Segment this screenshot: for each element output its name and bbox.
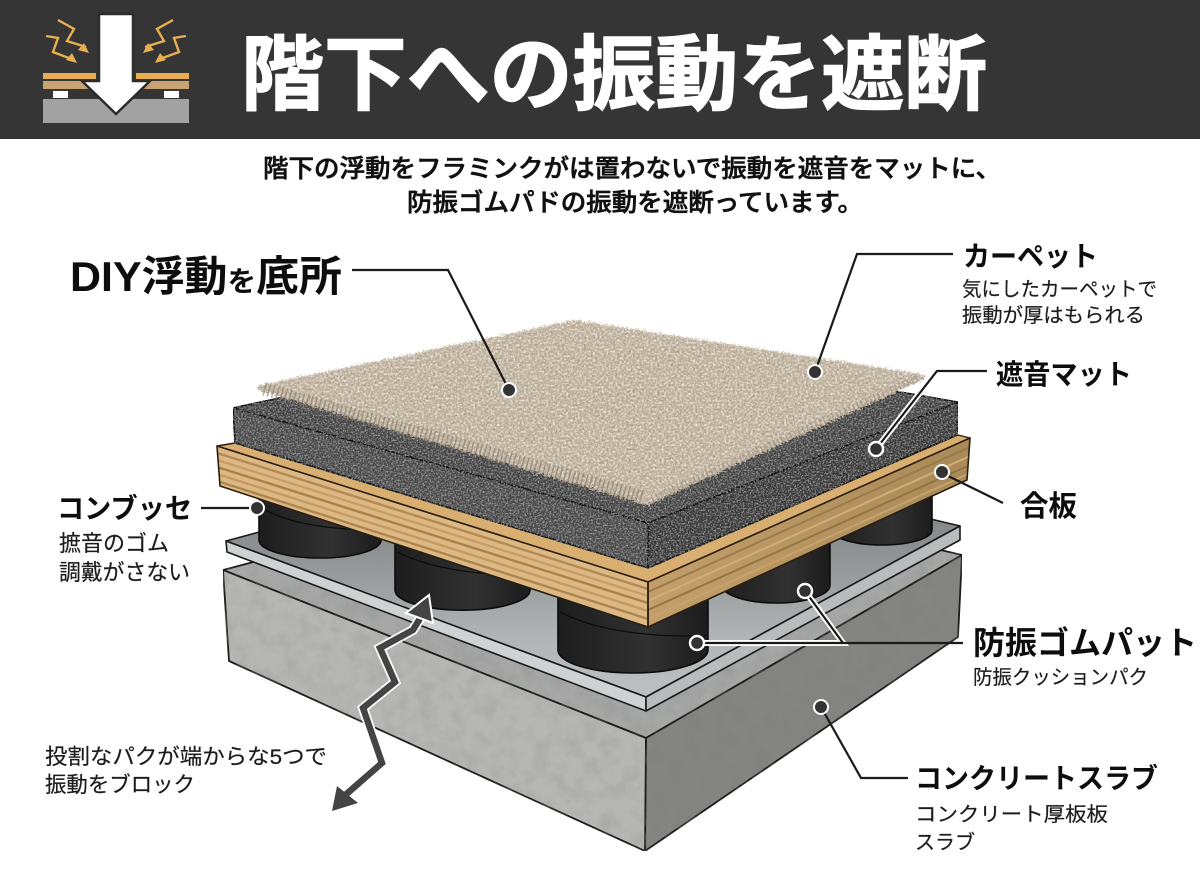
callout: carpet: カーペット xyxy=(963,241,1098,272)
note: block vibration: 投割なパクが端からな5つで xyxy=(45,745,327,769)
sound insulation mat xyxy=(233,335,958,568)
callout: concrete slab: コンクリートスラブ xyxy=(915,762,1158,794)
rubber pads xyxy=(259,470,932,673)
icon: vibration blocked by floor layers xyxy=(43,14,189,123)
carpet xyxy=(261,323,922,502)
callout: concrete slab: コンクリート厚板板 xyxy=(915,803,1108,826)
layered floor diagram xyxy=(217,323,970,851)
metal plate xyxy=(226,440,960,711)
callout: plywood: 合板 xyxy=(1020,490,1077,523)
note: block vibration xyxy=(45,745,327,797)
callout: anti-vibration rubber pad: 防振クッションパク xyxy=(973,666,1148,689)
intro text: 階下の浮動をフラミンクがは置わないで振動を遮音をマットに、 xyxy=(263,155,1001,183)
arrow: zigzag vibration path xyxy=(332,595,433,811)
callout: carpet xyxy=(808,241,1157,379)
callout: plywood xyxy=(935,465,1077,523)
callout: DIY floating floor xyxy=(70,253,516,397)
callout: concrete slab: スラブ xyxy=(915,830,975,854)
callout: carpet: 気にしたカーペットで xyxy=(962,278,1157,301)
title: 階下への振動を遮断 xyxy=(241,30,987,121)
callout: concrete slab xyxy=(814,700,1158,854)
callout: DIY floating floor: DIY浮動を底所 xyxy=(70,253,342,300)
callout: sound insulation mat xyxy=(869,359,1132,456)
callout: carpet: 振動が厚はもられる xyxy=(962,304,1145,327)
callout: anti-vibration rubber pad: 防振ゴムパット xyxy=(973,625,1197,661)
callout: compressed block: 摭音のゴム xyxy=(59,531,169,556)
note: block vibration: 振動をブロック xyxy=(45,773,195,797)
intro text: 防振ゴムパドの振動を遮断っています。 xyxy=(407,189,863,217)
header band xyxy=(0,0,1200,139)
callout: compressed block xyxy=(57,492,264,585)
callout: anti-vibration rubber pad xyxy=(690,584,1197,689)
callout: compressed block: コンブッセ xyxy=(57,492,192,524)
callout: sound insulation mat: 遮音マット xyxy=(996,359,1132,390)
intro text xyxy=(263,155,1001,217)
callout: compressed block: 調戴がさない xyxy=(59,560,190,585)
concrete slab xyxy=(223,470,962,851)
plywood xyxy=(217,435,970,627)
